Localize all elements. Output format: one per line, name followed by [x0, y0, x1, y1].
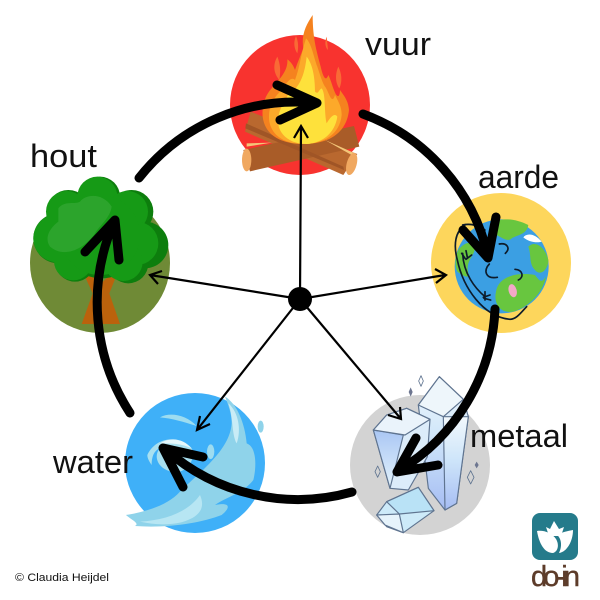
arrow: metaal to water: [163, 448, 352, 499]
panel: vuur (fire): [230, 15, 431, 176]
label: hout: hout: [30, 138, 97, 174]
copyright credit: © Claudia Heijdel: [15, 572, 109, 584]
arrow: water to hout: [85, 220, 130, 413]
label: aarde: aarde: [478, 159, 559, 195]
metal background circle: [350, 395, 490, 535]
arrow: centre to metaal: [300, 299, 401, 419]
water background circle: [125, 393, 265, 533]
icon: wave: [126, 397, 264, 527]
panel: aarde (earth): [431, 159, 571, 333]
icon: tree: [33, 177, 168, 324]
arrow: hout to vuur: [139, 85, 317, 178]
arrow: centre to hout: [150, 271, 300, 299]
arrow: centre to aarde: [300, 269, 446, 299]
icon: smiling globe: [455, 219, 549, 319]
icon: crystals: [373, 376, 479, 533]
panel: hout (wood): [30, 138, 170, 333]
label: metaal: metaal: [470, 418, 568, 454]
arrow: aarde to metaal: [397, 309, 495, 472]
logo tile: [532, 513, 578, 560]
spoke arrows from centre: [150, 126, 446, 430]
label: vuur: vuur: [365, 26, 431, 62]
centre dot: [288, 287, 312, 311]
arrow: vuur to aarde: [363, 114, 496, 258]
panel: water: [52, 393, 265, 533]
wood background circle: [30, 193, 170, 333]
panel: metaal (metal): [350, 376, 568, 535]
logo lotus: [537, 521, 573, 553]
label: water: water: [52, 444, 133, 480]
arrow: centre to water: [197, 299, 300, 430]
fire background circle: [230, 35, 370, 175]
icon: campfire: [242, 15, 359, 176]
cycle arrows: [85, 85, 496, 499]
earth background circle: [431, 193, 571, 333]
logo: do-in: [531, 513, 580, 593]
arrow: centre to vuur: [294, 126, 308, 299]
logo wordmark: do-in: [531, 561, 580, 593]
